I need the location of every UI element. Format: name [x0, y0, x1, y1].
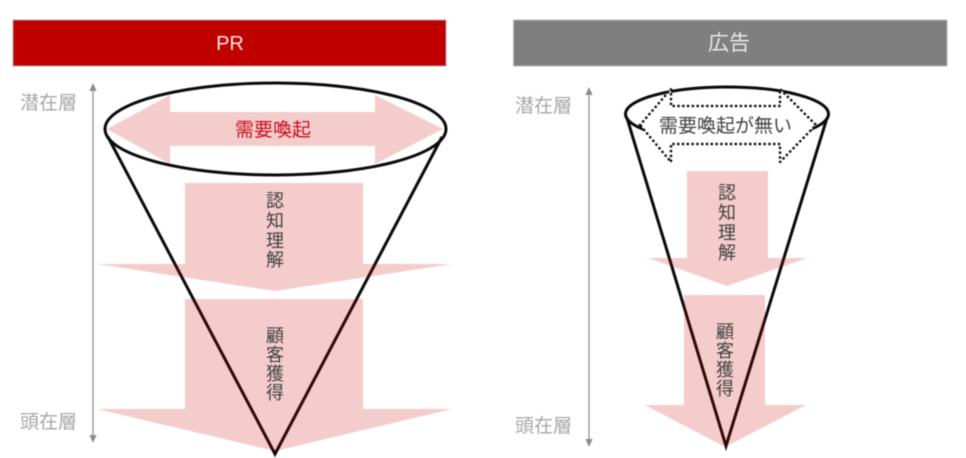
arrow: awareness and understanding	[97, 183, 452, 291]
text: 認知理解: 知	[266, 211, 284, 231]
arrow: no demand generation (dotted)	[640, 89, 816, 162]
arrow: customer acquisition	[97, 299, 452, 451]
axis arrow: latent to manifest	[585, 87, 593, 447]
text: 顧客獲得: 獲	[266, 364, 284, 384]
arrow: awareness and understanding	[648, 171, 807, 286]
text: 顧客獲得: 獲	[716, 360, 734, 380]
label: 潜在層: 潜在層	[20, 92, 77, 114]
text: 認知理解: 認	[266, 191, 284, 211]
label: 潜在層: 潜在層	[515, 95, 572, 117]
label: 頭在層: 頭在層	[20, 411, 77, 433]
text: 認知理解: 知	[718, 203, 736, 223]
text: 認知理解: 解	[718, 243, 736, 263]
arrow: customer acquisition	[645, 295, 806, 447]
heading: PR: PR	[216, 33, 244, 55]
heading: 広告	[514, 20, 947, 66]
text: 顧客獲得: 得	[266, 383, 284, 403]
text: 顧客獲得: 客	[266, 345, 284, 365]
text: 顧客獲得	[266, 326, 284, 403]
text: 認知理解: 解	[266, 250, 284, 270]
text: 顧客獲得: 客	[716, 341, 734, 361]
text: 認知理解	[718, 183, 736, 263]
axis arrow: latent to manifest	[89, 83, 97, 443]
text: 認知理解: 理	[718, 223, 736, 243]
text: 需要喚起: 需要喚起	[235, 119, 311, 141]
panel: PR funnel	[13, 20, 452, 454]
arrow: demand generation	[107, 95, 443, 164]
text: 顧客獲得: 顧	[266, 326, 284, 346]
text: 顧客獲得: 得	[716, 379, 734, 399]
text: 認知理解	[266, 191, 284, 270]
heading: PR	[13, 20, 446, 66]
heading: 広告: 広告	[708, 32, 750, 55]
funnel outline	[105, 83, 446, 454]
panel: advertising funnel	[514, 20, 947, 447]
label: 頭在層: 頭在層	[515, 415, 572, 437]
funnel outline	[626, 87, 828, 446]
text: 顧客獲得	[716, 322, 734, 399]
text: 認知理解: 理	[266, 231, 284, 251]
text: 需要喚起が無い: 需要喚起が無い	[659, 115, 792, 137]
text: 認知理解: 認	[718, 183, 736, 203]
text: 顧客獲得: 顧	[716, 322, 734, 342]
